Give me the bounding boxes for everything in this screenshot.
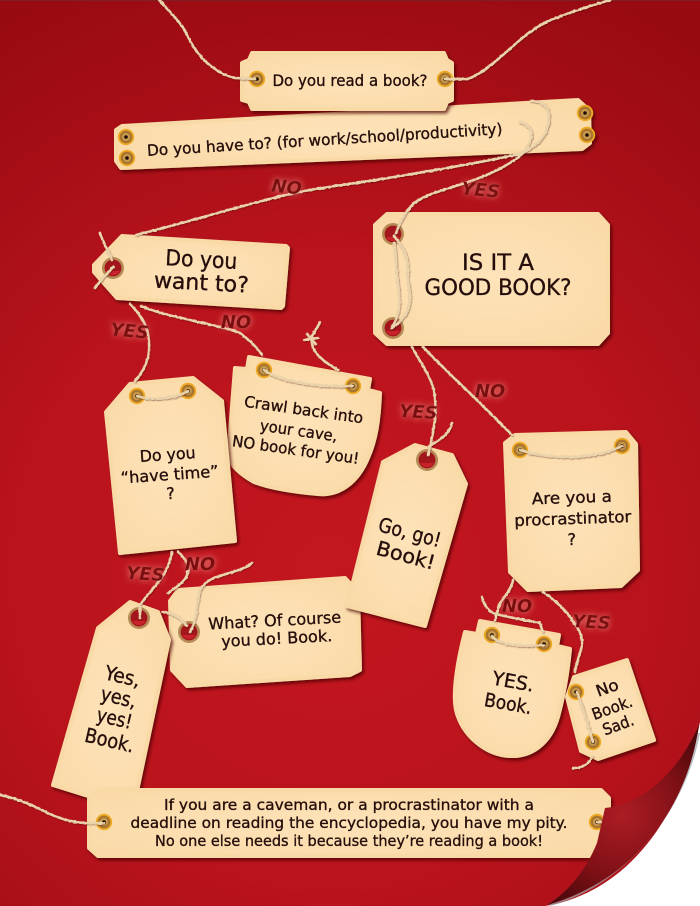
tag: crawl back: your cave, [259, 417, 339, 445]
page curl [545, 722, 700, 906]
tag: is it a good book [375, 214, 608, 344]
string: closing note left [0, 795, 104, 823]
string: no book loop [573, 692, 593, 768]
tag: crawl back: NO book for you! [231, 432, 360, 468]
string: yes to go [412, 347, 452, 455]
string: closing note right [597, 821, 612, 823]
yes and no labels: NO [270, 176, 303, 200]
tag: what of course [170, 578, 360, 686]
tag: go go book: Go, go! [376, 512, 444, 552]
tag: yes yes yes book: Book. [83, 723, 137, 757]
tag: do you want to [94, 236, 288, 308]
tag: do you have time: ? [166, 484, 176, 503]
string: have time loop [137, 391, 188, 399]
string: yes book loop [492, 636, 544, 646]
tag: no book sad: No [593, 675, 621, 701]
tag: are you a procrastinator: Are you a [532, 487, 612, 508]
tag: no book sad [567, 660, 654, 759]
tag: closing note: No one else needs it because they’re reading a book! [155, 832, 543, 850]
yes and no labels: NO [502, 596, 532, 617]
yes and no labels [109, 176, 611, 634]
tag: do you have to [116, 100, 595, 168]
string: yes to have time [130, 304, 149, 381]
tag: yes yes yes book: yes, [98, 681, 139, 713]
tag: no book sad: Book. [589, 692, 635, 724]
tag: yes yes yes book [53, 602, 169, 810]
tag: yes yes yes book: Yes, [101, 660, 143, 692]
tag: go go book [347, 445, 466, 626]
yes and no labels: YES [460, 178, 500, 203]
string: what tail [190, 563, 252, 632]
tag: crawl back: Crawl back into [243, 393, 364, 427]
tag: is it a good book: IS IT A [462, 251, 534, 276]
string: procrastinator loop [520, 446, 622, 457]
tag: do you have to: Do you have to? (for work/school/productivity) [146, 120, 503, 160]
tag: are you a procrastinator [505, 432, 638, 590]
string: yes to yes [140, 552, 172, 618]
yes and no labels: YES [399, 401, 438, 424]
string: no to want [136, 101, 549, 235]
string: top right [445, 0, 610, 79]
string: crawl loop [264, 370, 353, 386]
tag: yes yes yes book: yes! [94, 702, 135, 734]
tag: closing note: If you are a caveman, or a procrastinator with a [164, 796, 534, 814]
tag: go go book: Book! [374, 536, 438, 575]
yes and no labels: NO [475, 381, 505, 402]
yes and no labels: YES [126, 563, 165, 586]
tag: closing note [89, 790, 609, 856]
tag: do you have time: “have time” [120, 462, 219, 487]
tag: is it a good book: GOOD BOOK? [424, 276, 572, 301]
tag: yes book [455, 621, 570, 756]
tag: do you have time: Do you [139, 443, 196, 466]
yes and no labels: NO [185, 554, 215, 575]
tag: crawl back [228, 357, 380, 494]
tag: yes book: YES. [489, 667, 536, 697]
tag: do you want to: Do you [165, 246, 238, 275]
tag: are you a procrastinator: procrastinator [514, 507, 632, 530]
tag: no book sad: Sad. [600, 710, 636, 739]
tag: do you want to: want to? [153, 269, 249, 298]
string: no to procrastinator [423, 347, 512, 435]
tag: do you read a book [242, 53, 453, 109]
tag: yes book: Book. [482, 689, 534, 719]
string: yes to no book [543, 592, 582, 672]
tag: do you have time [106, 378, 235, 553]
tag: do you read a book: Do you read a book? [272, 71, 428, 90]
tag: closing note: deadline on reading the encyclopedia, you have my pity. [130, 814, 568, 832]
string: want to frayed [95, 233, 114, 288]
string: no to yes book [482, 580, 543, 632]
tag: are you a procrastinator: ? [567, 530, 576, 549]
tag: what of course: What? Of course [208, 608, 342, 633]
string: crawl tail [304, 322, 338, 370]
string: good book loop [392, 236, 410, 328]
tag: what of course: you do! Book. [221, 626, 333, 651]
string: no to crawl [141, 306, 262, 355]
yes and no labels: YES [109, 319, 149, 344]
yes and no labels: NO [221, 312, 251, 333]
string: top left [159, 0, 255, 79]
yes and no labels: YES [572, 611, 611, 634]
string: yes to good book [396, 122, 531, 233]
string: no to what [163, 552, 188, 626]
